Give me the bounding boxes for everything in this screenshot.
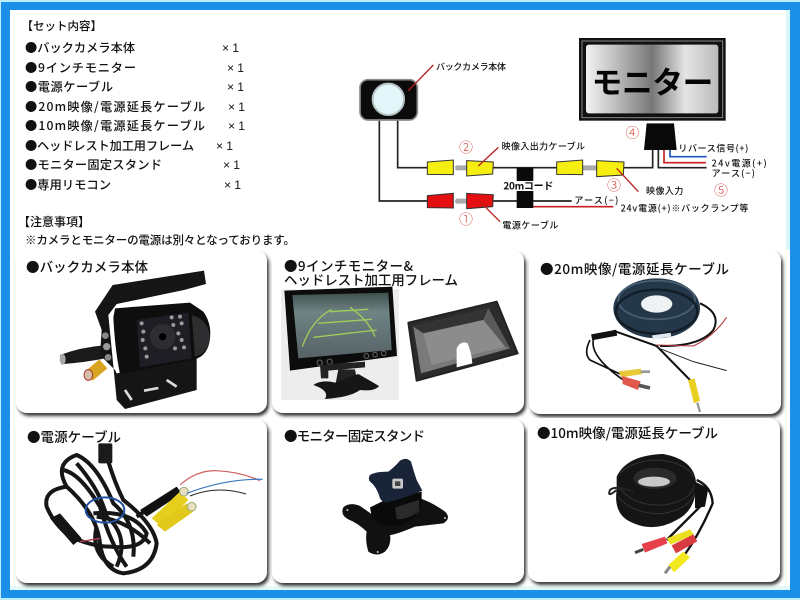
circled numbers [459,125,728,228]
panel: monitor stand [272,419,524,583]
item: 20m cable: ×1 [228,100,245,114]
camera label: バックカメラ本体 [436,60,506,73]
item: headrest frame: ●ヘッドレスト加工用フレーム [25,136,194,154]
item: camera [25,38,239,56]
wires [379,120,707,207]
item: 20m cable: ●20m映像/電源延長ケーブル [25,97,205,115]
circled numbers: ③ [607,177,621,193]
monitor box [579,38,726,121]
circled numbers: ⑤ [714,182,728,198]
video connectors [427,160,624,177]
item: headrest frame: ×1 [216,139,233,153]
notes [18,213,295,248]
item: 9 inch monitor: ×1 [227,61,244,75]
item: 10m cable: ×1 [228,119,245,133]
diagram labels [502,140,767,231]
panel heading: ●バックカメラ本体 [26,256,148,276]
item: power cable: ●電源ケーブル [25,77,113,95]
panel: 9 inch monitor and frame [272,250,524,413]
panel heading: ●電源ケーブル [27,426,121,446]
diagram labels: 電源ケーブル [502,218,558,231]
item: power cable: ×1 [227,80,244,94]
power connectors [427,193,493,209]
20m cord: 20mコード [503,178,553,193]
item: camera: ●バックカメラ本体 [25,38,135,56]
circled numbers: ① [459,212,473,228]
panel heading: ●モニター固定スタンド [284,425,425,445]
item: monitor stand [25,155,240,173]
panel heading [284,255,458,289]
item: remote [25,175,241,193]
item: power cable [25,77,244,95]
leader lines [478,147,638,222]
set contents list [22,18,245,193]
20m cord [503,168,553,208]
panel heading: ●9インチモニター& [284,255,413,275]
circled numbers: ④ [625,125,639,141]
photo: 10m cable coil [609,454,713,573]
panel: 20m cable [529,250,781,414]
note text: ※カメラとモニターの電源は別々となっております。 [25,232,295,248]
item: monitor stand: ×1 [223,158,240,172]
diagram labels: 24v電源(+)※バックランプ等 [621,201,748,214]
camera icon [360,80,417,120]
item: 9 inch monitor: ●9インチモニター [25,58,136,76]
camera label [408,60,506,91]
diagram labels: 24v電源(+) [712,156,767,169]
photo: stand [342,459,448,554]
wiring diagram [360,38,767,231]
circled numbers: ② [459,140,473,156]
diagram labels: アース(−) [712,166,755,179]
diagram labels: 映像入力 [646,184,683,197]
photo: monitor [281,287,399,400]
panel: back camera [16,250,267,413]
panel heading: ヘッドレスト加工用フレーム [284,269,458,289]
item: 10m cable: ●10m映像/電源延長ケーブル [25,116,205,134]
photo: 20m cable coil [587,278,727,412]
panel heading: ●20m映像/電源延長ケーブル [540,258,729,278]
item: 9 inch monitor [25,58,244,76]
panel: power cable [16,419,267,583]
monitor connector [644,123,677,150]
diagram labels: リバース信号(+) [678,141,748,154]
item: camera: ×1 [222,41,239,55]
monitor box: モニター [592,57,713,102]
photo: headrest frame [408,302,518,381]
photo: power cable [46,443,263,573]
heading: set contents: 【セット内容】 [22,18,102,34]
diagram labels: アース(−) [574,193,618,206]
item: monitor stand: ●モニター固定スタンド [25,155,162,173]
diagram labels: 映像入出力ケーブル [502,140,585,153]
photo: camera [60,271,210,409]
panel: 10m cable [528,418,780,582]
item: remote: ×1 [224,178,241,192]
item: remote: ●専用リモコン [25,175,111,193]
heading: notes: 【注意事項】 [18,213,90,230]
panel heading: ●10m映像/電源延長ケーブル [537,422,718,442]
